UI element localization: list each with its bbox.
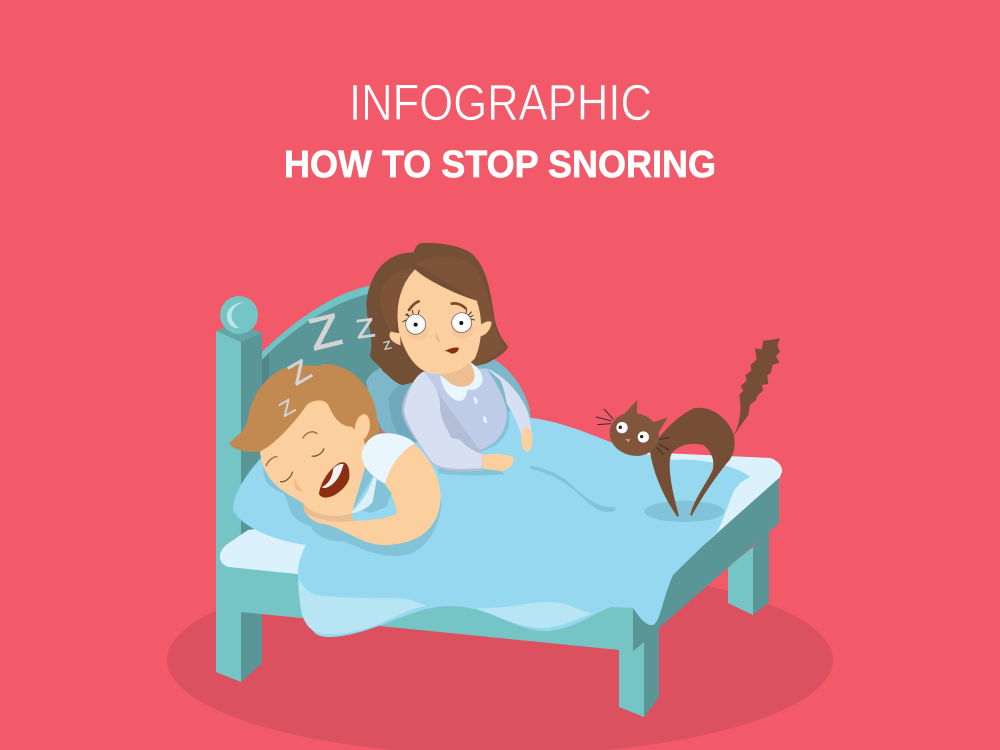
- woman: [366, 243, 533, 475]
- man nose: [294, 477, 304, 491]
- blanket right fold: [477, 602, 592, 628]
- woman's pillow: [366, 358, 531, 470]
- woman pyjamas torso: [423, 368, 507, 451]
- cat: [596, 338, 780, 522]
- man face: [260, 400, 368, 516]
- left bed post: [216, 323, 262, 682]
- man arm: [303, 443, 441, 545]
- woman hair highlight: [380, 257, 505, 367]
- cat whiskers: [596, 409, 669, 454]
- shadow cast by man: [263, 463, 442, 556]
- woman mouth: [444, 347, 459, 354]
- cat head: [605, 407, 664, 461]
- woman left arm: [402, 372, 514, 472]
- man mouth: [319, 462, 349, 498]
- man teeth: [322, 464, 344, 488]
- heading: how to stop snoring: HOW TO STOP SNORING: [284, 144, 716, 186]
- headboard: [262, 285, 400, 560]
- woman collar: [440, 361, 483, 401]
- bed post knob: [220, 296, 258, 334]
- medium Z: Z: [354, 313, 377, 345]
- snoring Z letters: [275, 304, 393, 421]
- cat body: [650, 408, 735, 517]
- man eyebrows: [266, 432, 317, 466]
- man neck shade: [303, 503, 353, 522]
- blanket: [233, 410, 750, 637]
- cat tail: [733, 338, 780, 437]
- man hair: [229, 364, 380, 452]
- man sleeve: [362, 433, 415, 483]
- woman hair: [366, 243, 508, 385]
- back right leg: [728, 530, 769, 615]
- cat ears: [623, 400, 668, 433]
- heading: infographic: INFOGRAPHIC: [349, 74, 652, 131]
- man: [229, 364, 442, 556]
- man closed eyes: [280, 448, 324, 482]
- shadow beneath woman: [438, 410, 509, 475]
- cat shadow: [644, 501, 724, 522]
- woman right eye: [452, 309, 475, 333]
- floor shadow ellipse: [167, 565, 833, 750]
- tiny Z: Z: [382, 338, 393, 353]
- woman nose: [435, 332, 441, 342]
- woman face: [398, 269, 481, 374]
- man ear: [353, 413, 372, 442]
- bed frame: [216, 285, 769, 682]
- front rail and right leg: [228, 478, 779, 717]
- woman right arm: [487, 368, 533, 452]
- blanket crease: [530, 466, 616, 512]
- blanket seen under arm: [350, 477, 397, 521]
- mattress: [220, 452, 782, 577]
- cat nose: [626, 439, 630, 442]
- blanket left fold: [298, 578, 427, 634]
- cat eyes: [616, 422, 649, 443]
- eye bags: [406, 321, 474, 340]
- woman left eye: [402, 310, 426, 334]
- woman ears: [390, 321, 492, 345]
- gap of background between hair and sleeve: [379, 429, 386, 434]
- big Z: Z: [304, 304, 346, 361]
- woman neck: [440, 361, 475, 387]
- Z over hair: Z: [282, 352, 317, 392]
- small Z over hair: Z: [275, 394, 299, 421]
- pyjama buttons: [473, 396, 488, 424]
- woman eyebrows: [409, 301, 466, 310]
- title block: [284, 74, 716, 186]
